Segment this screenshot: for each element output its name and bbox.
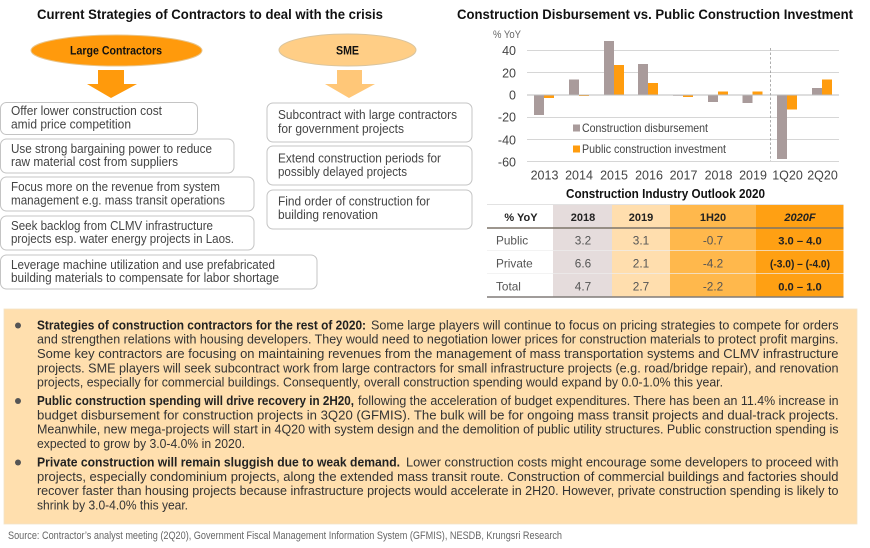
- bullet: public construction: expected to grow by 3.0-4.0% in 2020.: [37, 437, 245, 451]
- table header: [504, 212, 816, 224]
- y axis labels: 20: [502, 66, 516, 80]
- box: lower cost: Offer lower construction cost: [11, 103, 162, 118]
- bullet: public construction: [15, 394, 839, 451]
- box: system management: management e.g. mass transit operations: [11, 192, 225, 208]
- row: public: 3.0 – 4.0: [778, 236, 822, 248]
- row: private: (-3.0) – (-4.0): [770, 258, 830, 270]
- y axis labels: -20: [498, 110, 516, 124]
- row: private: -4.2: [703, 256, 723, 270]
- box: system management: [0, 177, 254, 211]
- bullet: strategies: projects, especially for commercial buildings. Consequently, overall construction spending would expand by 0.0-1.0% this year.: [37, 376, 723, 390]
- box: system management: Focus more on the revenue from system: [11, 179, 220, 194]
- row: public: -0.7: [703, 234, 723, 248]
- row: public: Public: [496, 234, 528, 248]
- x axis labels: 2013: [531, 168, 558, 182]
- bullet: strategies: Some large players will continue to focus on pricing strategies to compete for orders: [371, 318, 838, 332]
- row: private: [496, 256, 830, 270]
- title: contractor strategies: Current Strategies of Contractors to deal with the crisis: [37, 7, 383, 23]
- panel: SME: [267, 34, 472, 229]
- bars: construction disbursement: [534, 41, 822, 159]
- row: total: -2.2: [703, 280, 723, 294]
- row: private: 6.6: [575, 256, 592, 270]
- row: total: [496, 280, 822, 294]
- row: private: Private: [496, 256, 533, 270]
- table header: 2018: [571, 212, 595, 224]
- bar chart: disbursement vs investment: [493, 29, 839, 182]
- box: subcontract: for government projects: [278, 121, 404, 136]
- box: lower cost: amid price competition: [11, 116, 131, 132]
- x axis labels: 2019: [739, 168, 767, 182]
- x axis labels: 2Q20: [807, 168, 838, 182]
- bullet: public construction: following the acceleration of budget expenditures. There has been an 11.4% increase in: [358, 394, 838, 408]
- row: total: Total: [496, 280, 521, 294]
- x axis labels: 2018: [705, 168, 732, 182]
- x axis labels: 2017: [670, 168, 697, 182]
- bullet: strategies: and strengthen relations with housing developers. They would need to negotiation lower prices for construction materials to protect profit margins.: [37, 332, 838, 346]
- bullet: private construction: shrink by 3.0-4.0% this year.: [37, 498, 188, 512]
- panel: large contractors: [0, 35, 317, 289]
- box: CLMV backlog: Seek backlog from CLMV infrastructure: [11, 218, 213, 233]
- legend: Construction disbursement: [582, 121, 709, 135]
- box: extend periods: Extend construction periods for: [278, 150, 442, 166]
- panel: commentary: [4, 309, 857, 524]
- bullet: private construction: projects, especially condominium projects, along the extended mass transit route. Construction of commercial buildings and factories should: [37, 470, 839, 484]
- y axis labels: [498, 44, 516, 170]
- table header: 1H20: [700, 212, 726, 224]
- table: construction industry outlook: [487, 204, 844, 297]
- box: lower cost: [0, 102, 198, 134]
- row: total: 2.7: [633, 280, 649, 294]
- arrow: large contractors: [87, 70, 137, 98]
- bullet: private construction: recover faster than housing projects because infrastructure projects would accelerate in 2H20. However, private construction spending is likely to: [37, 484, 838, 498]
- bullet: public construction: Meanwhile, new mega-projects will start in 4Q20 with system design and the demolition of public utility structures. Public construction spending is: [37, 422, 838, 436]
- axis unit: % YoY: [493, 29, 522, 41]
- box: extend periods: [267, 146, 472, 185]
- source note: Source: Contractor’s analyst meeting (2Q20), Government Fiscal Management Information System (GFMIS), NESDB, Krungsri Research: [8, 530, 562, 542]
- table header: 2020F: [783, 212, 816, 224]
- table header: % YoY: [504, 212, 538, 224]
- row: public: 3.1: [633, 234, 649, 248]
- row: public: 3.2: [575, 234, 591, 248]
- x axis labels: 2015: [600, 168, 628, 182]
- box: extend periods: possibly delayed projects: [278, 164, 407, 179]
- bars: public construction investment: [544, 65, 832, 110]
- oval: large contractors: Large Contractors: [70, 44, 162, 58]
- legend: Public construction investment: [582, 142, 727, 156]
- box: subcontract: [267, 103, 472, 142]
- table header: 2019: [629, 212, 653, 224]
- box: machine utilization: building materials to compensate for labor shortage: [11, 270, 279, 285]
- row: total: 0.0 – 1.0: [778, 282, 822, 294]
- row: public: [496, 234, 822, 248]
- bullet: public construction: Public construction spending will drive recovery in 2H20,: [37, 394, 354, 408]
- row: total: 4.7: [575, 280, 591, 294]
- y axis labels: -60: [498, 156, 516, 170]
- box: bargaining power: Use strong bargaining power to reduce: [11, 141, 212, 156]
- y axis labels: 0: [509, 88, 516, 102]
- oval: SME: SME: [336, 44, 359, 58]
- y axis labels: 40: [502, 44, 516, 58]
- bullet: private construction: [15, 456, 839, 512]
- arrow: SME: [325, 70, 375, 98]
- bullet: strategies: [15, 318, 839, 390]
- box: renovation: building renovation: [278, 207, 378, 222]
- box: machine utilization: [0, 255, 317, 289]
- box: CLMV backlog: projects esp. water energy projects in Laos.: [11, 231, 234, 246]
- bullet: private construction: Private construction will remain sluggish due to weak demand.: [37, 456, 400, 470]
- x axis labels: 1Q20: [772, 168, 803, 182]
- box: machine utilization: Leverage machine utilization and use prefabricated: [11, 257, 275, 272]
- bullet: strategies: projects. SME players will seek subcontract work from large contractors for small infrastructure projects (e.g. road/bridge repair), and renovation: [37, 362, 838, 376]
- bullet: private construction: Lower construction costs might encourage some developers to proceed with: [406, 456, 838, 470]
- y axis labels: -40: [498, 134, 516, 148]
- oval: large contractors: [31, 35, 202, 66]
- box: renovation: [267, 190, 472, 229]
- bullet: public construction: budget disbursement for construction projects in 3Q20 (GFMIS). The bulk will be for ongoing mass transit projects and dual-track projects.: [37, 408, 839, 422]
- bullet: strategies: Strategies of construction contractors for the rest of 2020:: [37, 318, 366, 332]
- bullet: strategies: Some key contractors are focusing on maintaining revenues from the management of mass transportation systems and CLMV infrastructure: [37, 347, 839, 361]
- title: outlook table: Construction Industry Outlook 2020: [566, 187, 765, 201]
- box: bargaining power: [0, 139, 234, 173]
- oval: SME: [279, 34, 416, 66]
- x axis labels: 2014: [565, 168, 593, 182]
- x axis labels: 2016: [635, 168, 663, 182]
- x axis labels: [531, 168, 838, 182]
- legend: [573, 121, 727, 156]
- box: subcontract: Subcontract with large contractors: [278, 107, 457, 122]
- box: bargaining power: raw material cost from suppliers: [11, 154, 178, 169]
- box: CLMV backlog: [0, 216, 254, 250]
- row: private: 2.1: [633, 256, 649, 270]
- box: renovation: Find order of construction for: [278, 194, 431, 208]
